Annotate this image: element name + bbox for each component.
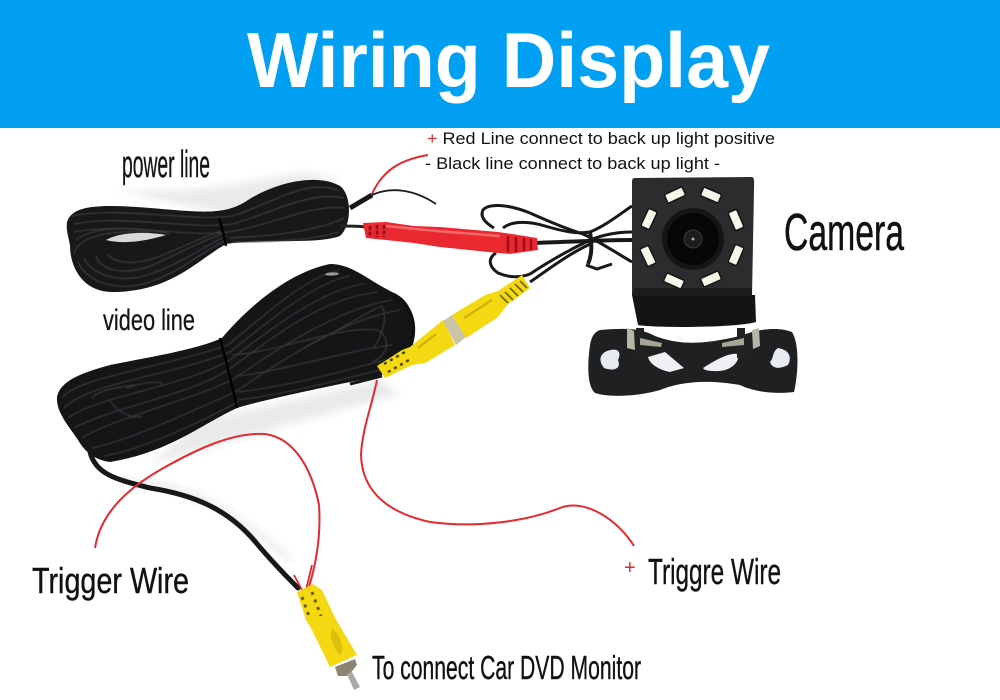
red trigger wire left xyxy=(95,434,319,590)
camera cable loop xyxy=(482,205,632,282)
red trigger wire right xyxy=(361,380,634,546)
power line coil xyxy=(67,172,349,292)
yellow video connector xyxy=(377,275,530,378)
header banner xyxy=(0,0,1000,128)
light loop gap in power coil xyxy=(106,233,166,242)
label: video line: video line xyxy=(103,304,195,337)
label: power line: power line xyxy=(122,144,210,186)
camera xyxy=(588,177,798,396)
label: camera: Camera xyxy=(784,204,904,262)
yellow RCA plug xyxy=(297,584,360,690)
label: trigger wire left: Trigger Wire xyxy=(32,560,189,601)
red power connector xyxy=(363,222,538,254)
camera bracket xyxy=(588,328,798,396)
power line wires xyxy=(340,155,436,227)
label: trigger wire right: + xyxy=(624,557,636,579)
black video tail cable xyxy=(90,452,298,588)
label: to connect car DVD monitor: To connect Car DVD Monitor xyxy=(372,649,641,686)
label: trigger wire right: Triggre Wire xyxy=(648,551,781,592)
label: positive line note: + Red Line connect to back up light positive xyxy=(427,129,775,148)
camera LEDs xyxy=(641,188,743,288)
video line coil xyxy=(57,264,413,465)
label: trigger wire right xyxy=(624,551,781,592)
title: Wiring Display xyxy=(247,16,770,104)
camera lens xyxy=(662,208,724,270)
label: negative line note: - Black line connect to back up light - xyxy=(425,154,720,173)
camera body xyxy=(632,295,756,327)
